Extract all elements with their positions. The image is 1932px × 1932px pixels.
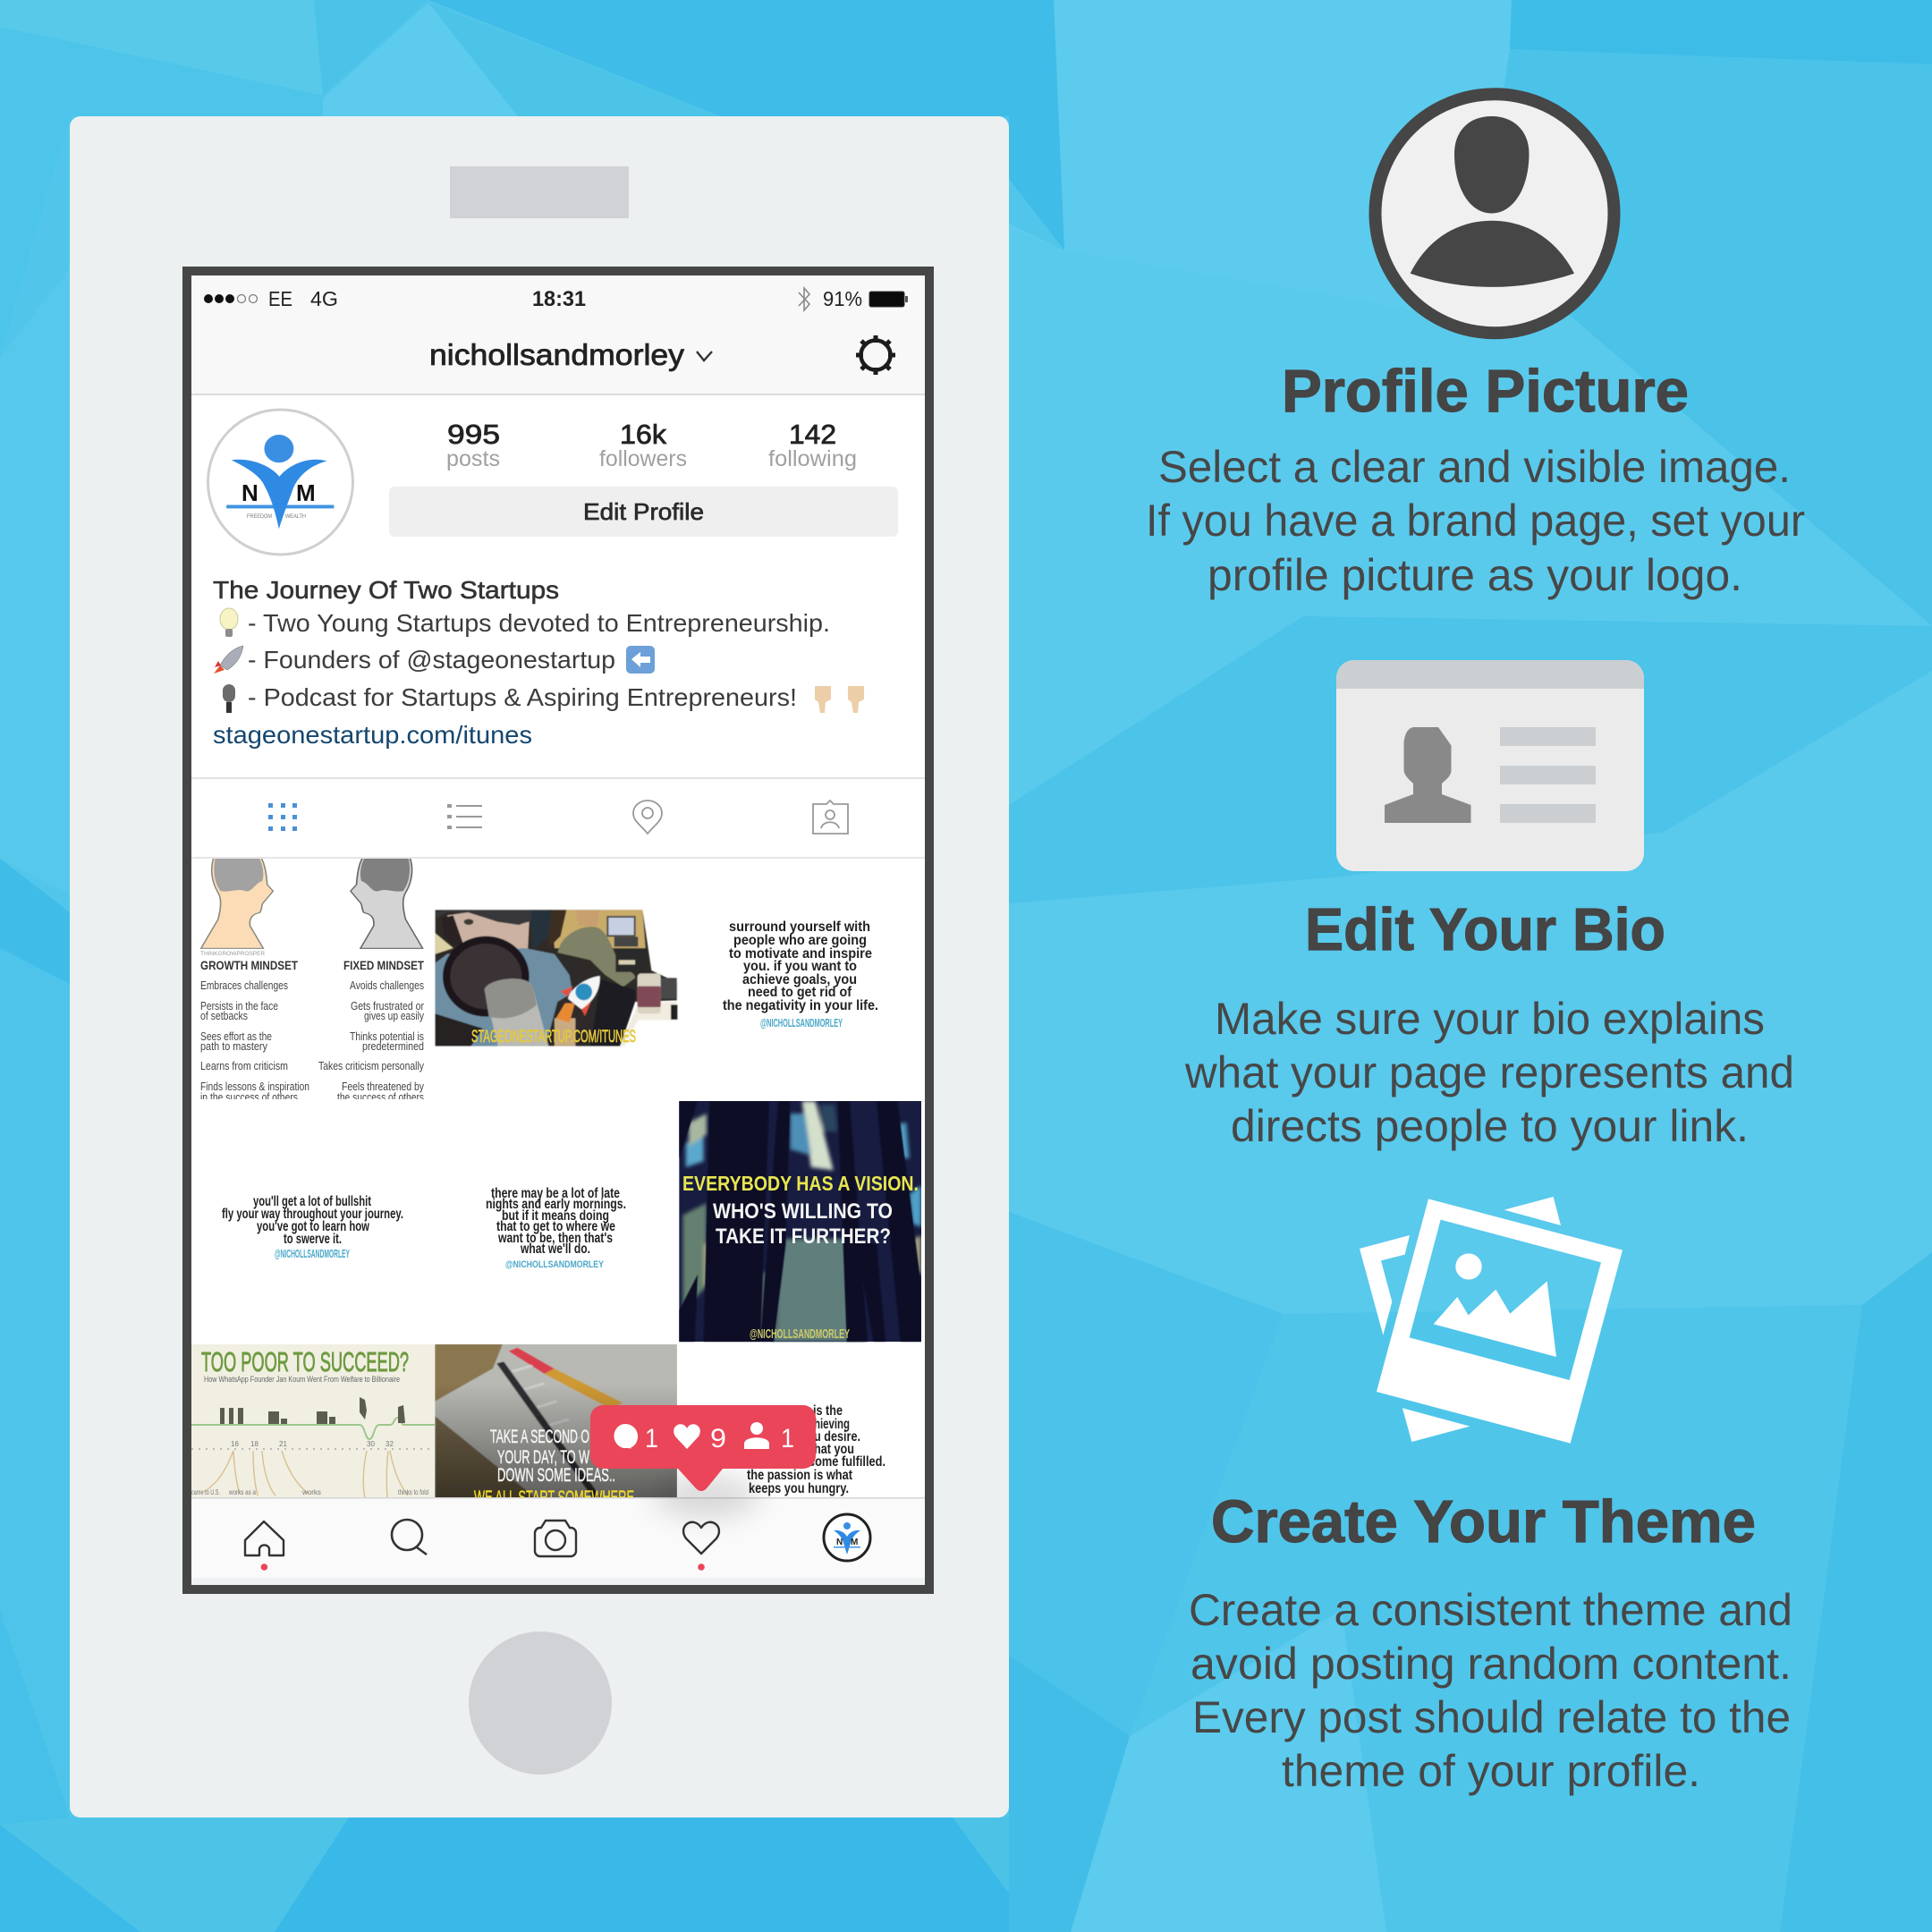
text: theme description: Create a consistent theme and: [1189, 1585, 1792, 1635]
icon: microphone: [223, 684, 235, 713]
edit profile button: [389, 487, 898, 537]
icon: profile avatar: M: [851, 1538, 858, 1547]
text: theme description: theme of your profile.: [1282, 1746, 1700, 1796]
post tile: too poor to succeed infographic: 21: [279, 1440, 287, 1448]
post tile: too poor to succeed infographic: 32: [386, 1440, 394, 1448]
icon: light bulb: [220, 608, 238, 637]
post tile: forest vision photo: TAKE IT FURTHER?: [716, 1224, 891, 1249]
post tile: surround yourself quote: to motivate and inspire: [729, 946, 872, 962]
profile avatar logo: WEALTH: [285, 514, 306, 520]
post tile: growth vs fixed mindset: GROWTH MINDSET: [200, 958, 298, 972]
phone home button: [469, 1631, 612, 1775]
profile tab icons: [268, 801, 848, 834]
post tile: passion quote: keeps you hungry.: [749, 1481, 849, 1496]
post tile: growth vs fixed mindset: Gets frustrated or: [351, 999, 425, 1013]
post tile: too poor to succeed infographic: 16: [231, 1440, 239, 1448]
post tile: surround yourself quote: you. if you want to: [743, 959, 857, 974]
post tile: too poor to succeed infographic: 30: [367, 1440, 375, 1448]
post tile: late nights quote: [486, 1186, 626, 1270]
text: profile picture description: If you have a brand page, set your: [1146, 496, 1805, 546]
icon: bio card: [1336, 660, 1644, 871]
post tile: too poor to succeed infographic: [191, 1344, 435, 1498]
heading: Profile Picture: Profile Picture: [1282, 358, 1689, 425]
post tile: bullshit quote: you've got to learn how: [257, 1219, 369, 1234]
heading: Create Your Theme: Create Your Theme: [1211, 1488, 1756, 1555]
post tile: growth vs fixed mindset: Feels threatened by: [342, 1080, 424, 1093]
post tile: forest vision photo: [679, 1101, 921, 1342]
post tile: surround yourself quote: surround yourself with: [729, 919, 870, 935]
heading: Edit Your Bio: Edit Your Bio: [1305, 896, 1665, 963]
post tile: too poor to succeed infographic: works as a: [228, 1488, 256, 1496]
profile avatar logo: M: [296, 479, 316, 506]
text: theme description: [1189, 1585, 1792, 1796]
icon: camera: [535, 1521, 576, 1556]
post tile: growth vs fixed mindset: [200, 856, 425, 1104]
phone speaker: [450, 166, 629, 218]
text: bio description: directs people to your link.: [1231, 1101, 1749, 1151]
post tile: late nights quote: @NICHOLLSANDMORLEY: [505, 1259, 605, 1270]
post tile: growth vs fixed mindset: Sees effort as the: [200, 1030, 272, 1043]
edit profile button: Edit Profile: [583, 498, 704, 525]
bio text: - Founders of @stageonestartup: [248, 646, 615, 674]
post tile: notebook photo: YOUR DAY, TO W: [497, 1447, 589, 1468]
post tile: podcast microphone photo: STAGEONESTARTUP.COM/ITUNES: [471, 1028, 636, 1046]
post tile: bullshit quote: @NICHOLLSANDMORLEY: [275, 1247, 350, 1260]
post tile: growth vs fixed mindset: gives up easily: [364, 1009, 424, 1022]
post tile: growth vs fixed mindset: Avoids challenges: [350, 979, 424, 992]
post tile: growth vs fixed mindset: in the success of others: [200, 1090, 298, 1104]
post tile: passion quote: u desire.: [814, 1429, 860, 1445]
post tile: too poor to succeed infographic: TOO POOR TO SUCCEED?: [201, 1346, 409, 1377]
header: username and settings: nichollsandmorley: [429, 338, 685, 371]
status bar: EE: [268, 287, 292, 310]
header: username and settings: [429, 335, 895, 375]
post tile: passion quote: [747, 1403, 886, 1496]
post tile: late nights quote: want to be, then that's: [497, 1231, 613, 1246]
notification badge: [590, 1405, 816, 1517]
stats: posts, followers, following: [446, 419, 857, 471]
stats: posts, followers, following: 142: [789, 419, 836, 450]
post tile: notebook photo: WE ALL START SOMEWHERE: [474, 1487, 634, 1508]
icon: location pin tab: [633, 801, 662, 834]
post tile: passion quote: the passion is what: [747, 1468, 853, 1483]
profile avatar logo: [208, 410, 352, 555]
post tile: growth vs fixed mindset: Embraces challenges: [200, 979, 288, 992]
post tile: growth vs fixed mindset: Thinks potential is: [350, 1030, 424, 1043]
icon: comment: [614, 1424, 638, 1449]
stats: posts, followers, following: followers: [599, 446, 687, 471]
notification dots: [261, 1563, 705, 1571]
post tile: growth vs fixed mindset: of setbacks: [200, 1009, 248, 1022]
post tile: growth vs fixed mindset: the success of others: [337, 1090, 424, 1104]
notification badge: 1: [781, 1424, 794, 1453]
post tile: surround yourself quote: [723, 919, 878, 1030]
icon: profile avatar: [824, 1514, 870, 1561]
post tile: notebook photo: [435, 1344, 677, 1508]
post tile: late nights quote: that to get to where we: [496, 1219, 615, 1234]
text: bio description: [1184, 994, 1794, 1151]
status bar: 91%: [823, 287, 862, 310]
bio text: - Two Young Startups devoted to Entrepreneurship.: [248, 609, 830, 637]
text: profile picture description: [1146, 442, 1805, 600]
phone screen: Instagram profile: [182, 267, 934, 1594]
post tile: growth vs fixed mindset: Takes criticism personally: [318, 1059, 424, 1072]
post tile: too poor to succeed infographic: 18: [250, 1440, 258, 1448]
profile avatar logo: N: [242, 479, 258, 506]
post tile: growth vs fixed mindset: Learns from criticism: [200, 1059, 288, 1072]
bio text: - Podcast for Startups & Aspiring Entrepreneurs!: [248, 683, 797, 711]
post tile: growth vs fixed mindset: predetermined: [362, 1039, 424, 1053]
post tile: late nights quote: what we'll do.: [520, 1241, 590, 1257]
stats: posts, followers, following: 995: [447, 419, 500, 450]
post tile: passion quote: come fulfilled.: [809, 1454, 886, 1470]
text: profile picture description: Select a clear and visible image.: [1158, 442, 1791, 492]
text: profile picture description: profile picture as your logo.: [1208, 550, 1742, 600]
post tile: too poor to succeed infographic: works: [301, 1488, 321, 1496]
bio text: stageonestartup.com/itunes: [213, 721, 532, 749]
icon: tagged tab: [813, 801, 848, 834]
post tile: bullshit quote: fly your way throughout your journey.: [222, 1207, 403, 1222]
post tile: late nights quote: nights and early mornings.: [486, 1197, 626, 1212]
status bar: [204, 287, 908, 311]
post tile: late nights quote: but if it means doing: [502, 1208, 609, 1224]
post tile: forest vision photo: EVERYBODY HAS A VISION.: [682, 1172, 919, 1195]
post tile: surround yourself quote: people who are going: [733, 933, 867, 948]
post tile: notebook photo: DOWN SOME IDEAS..: [497, 1465, 615, 1486]
status bar: 4G: [310, 287, 338, 310]
post tile: podcast microphone photo: [436, 910, 677, 1046]
post tile: late nights quote: there may be a lot of late: [491, 1186, 620, 1201]
icon: pointing down hands: [815, 686, 864, 713]
post tile: passion quote: hieving: [814, 1417, 850, 1432]
post tile: too poor to succeed infographic: thinks to fold: [398, 1488, 428, 1496]
icon: follower: [744, 1422, 769, 1449]
icon: profile avatar: N: [836, 1538, 843, 1547]
post tile: too poor to succeed infographic: How WhatsApp Founder Jan Koum Went From Welfare to Billionaire: [204, 1375, 400, 1384]
text: theme description: Every post should relate to the: [1192, 1692, 1791, 1742]
icon: home: [245, 1521, 284, 1555]
post tile: surround yourself quote: achieve goals, you: [742, 972, 857, 987]
icon: profile picture: [1376, 94, 1614, 333]
stats: posts, followers, following: following: [768, 446, 857, 471]
post tile: passion quote: is the: [813, 1403, 843, 1419]
post tile: too poor to succeed infographic: came to U.S.: [191, 1488, 220, 1496]
text: bio description: Make sure your bio explains: [1215, 994, 1765, 1044]
bio text: The Journey Of Two Startups: [213, 576, 559, 604]
post tile: bullshit quote: [222, 1194, 403, 1260]
post tile: forest vision photo: @NICHOLLSANDMORLEY: [750, 1326, 850, 1342]
post tile: surround yourself quote: the negativity in your life.: [723, 998, 878, 1013]
notification badge: 9: [710, 1424, 726, 1453]
post tile: growth vs fixed mindset: Persists in the face: [200, 999, 278, 1013]
text: bio description: what your page represents and: [1184, 1047, 1794, 1097]
post tile: growth vs fixed mindset: THINKGROWPROSPER: [200, 952, 266, 957]
icon: list tab: [447, 804, 482, 829]
post tile: passion quote: hat you: [814, 1442, 854, 1457]
phone body: [70, 116, 1009, 1818]
post tile: growth vs fixed mindset: Finds lessons & inspiration: [200, 1080, 309, 1093]
stats: posts, followers, following: 16k: [620, 419, 667, 450]
icon: rocket: [214, 646, 243, 674]
post tile: bullshit quote: you'll get a lot of bullshit: [253, 1194, 371, 1209]
post tile: surround yourself quote: @NICHOLLSANDMORLEY: [760, 1016, 843, 1030]
status bar: 18:31: [532, 287, 586, 311]
post tile: growth vs fixed mindset: FIXED MINDSET: [343, 958, 424, 972]
icon: back arrow button: [626, 646, 655, 674]
icon: settings gear: [856, 335, 895, 375]
notification badge: 1: [645, 1424, 658, 1453]
post tile: growth vs fixed mindset: path to mastery: [200, 1039, 267, 1053]
stats: posts, followers, following: posts: [446, 446, 500, 471]
post tile: forest vision photo: WHO'S WILLING TO: [713, 1199, 893, 1224]
icon: photo stack: [1360, 1197, 1623, 1444]
icon: heart count: [674, 1424, 700, 1449]
bottom navigation bar: [191, 1497, 925, 1585]
icon: heart: [683, 1522, 719, 1554]
icon: search: [392, 1520, 427, 1555]
post tile: notebook photo: TAKE A SECOND O: [490, 1427, 589, 1447]
post tile: bullshit quote: to swerve it.: [284, 1232, 342, 1247]
icon: grid tab: [268, 803, 297, 831]
post tile: surround yourself quote: need to get rid of: [748, 985, 852, 1000]
text: theme description: avoid posting random content.: [1191, 1639, 1792, 1689]
bio text: [213, 576, 864, 749]
profile avatar logo: FREEDOM: [247, 514, 272, 520]
